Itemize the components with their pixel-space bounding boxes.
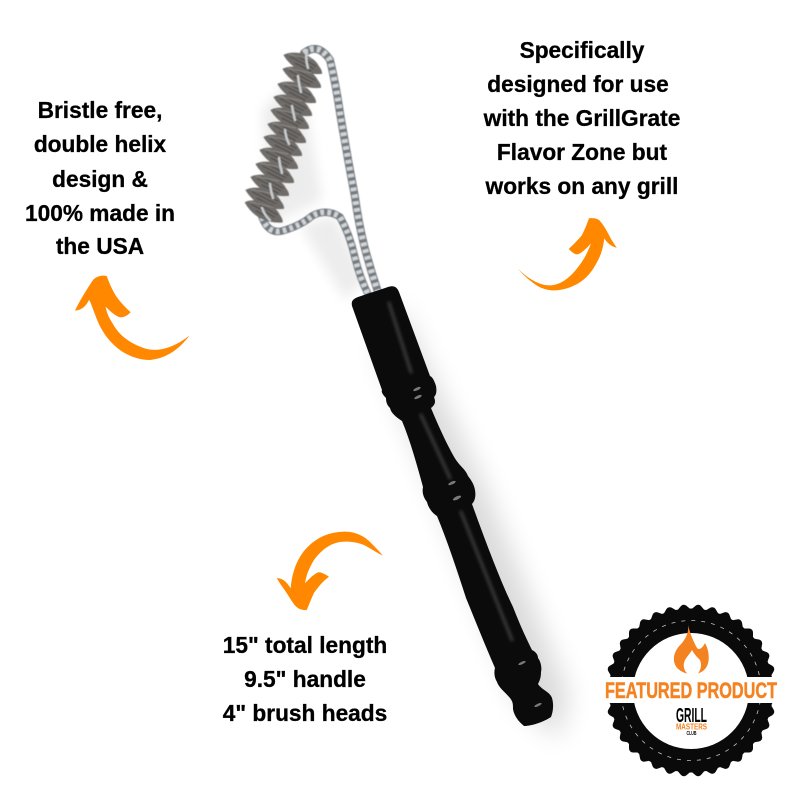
- handle ring glints: [413, 386, 542, 708]
- badge: featured product: [600, 603, 780, 778]
- text: bristle free: the USA: [56, 233, 144, 259]
- bristle discs: [241, 49, 326, 225]
- text: bristle free: double helix: [34, 131, 167, 157]
- brush: wire stem and bristle head: [241, 49, 378, 294]
- text: specifically designed: designed for use: [487, 71, 669, 97]
- handle highlights: [389, 303, 512, 640]
- badge serrated black seal: [604, 603, 778, 778]
- arrow: right, pointing up to text: [518, 218, 617, 290]
- text: dimensions: 9.5" handle: [244, 666, 366, 692]
- text: specifically designed: works on any grill: [485, 173, 678, 199]
- text: specifically designed: Flavor Zone but: [497, 139, 668, 165]
- text: dimensions: 15" total length: [223, 632, 387, 658]
- text: bristle free: [25, 97, 175, 259]
- logo: grill masters club: [676, 705, 707, 737]
- text: dimensions: 4" brush heads: [223, 700, 387, 726]
- logo: grill masters club: MASTERS: [676, 722, 707, 732]
- text: bristle free: Bristle free,: [38, 97, 162, 123]
- arrow: left, pointing up to head: [75, 276, 190, 360]
- text: specifically designed: with the GrillGrate: [483, 105, 680, 131]
- text: specifically designed: [483, 37, 680, 199]
- brush: black wooden handle: [352, 286, 553, 726]
- text: bristle free: design &: [52, 166, 148, 192]
- text: specifically designed: Specifically: [520, 37, 645, 63]
- central wire loops: [262, 50, 308, 220]
- brush drop shadow: [262, 70, 569, 739]
- logo: grill masters club: GRILL: [676, 705, 707, 727]
- text: bristle free: 100% made in: [25, 200, 175, 226]
- text: dimensions: [223, 632, 387, 726]
- arrow: bottom, pointing down to text: [277, 532, 383, 610]
- wire: twisted stem: [262, 49, 378, 294]
- logo: grill masters club: CLUB: [686, 731, 697, 737]
- icon: flame: [674, 625, 709, 674]
